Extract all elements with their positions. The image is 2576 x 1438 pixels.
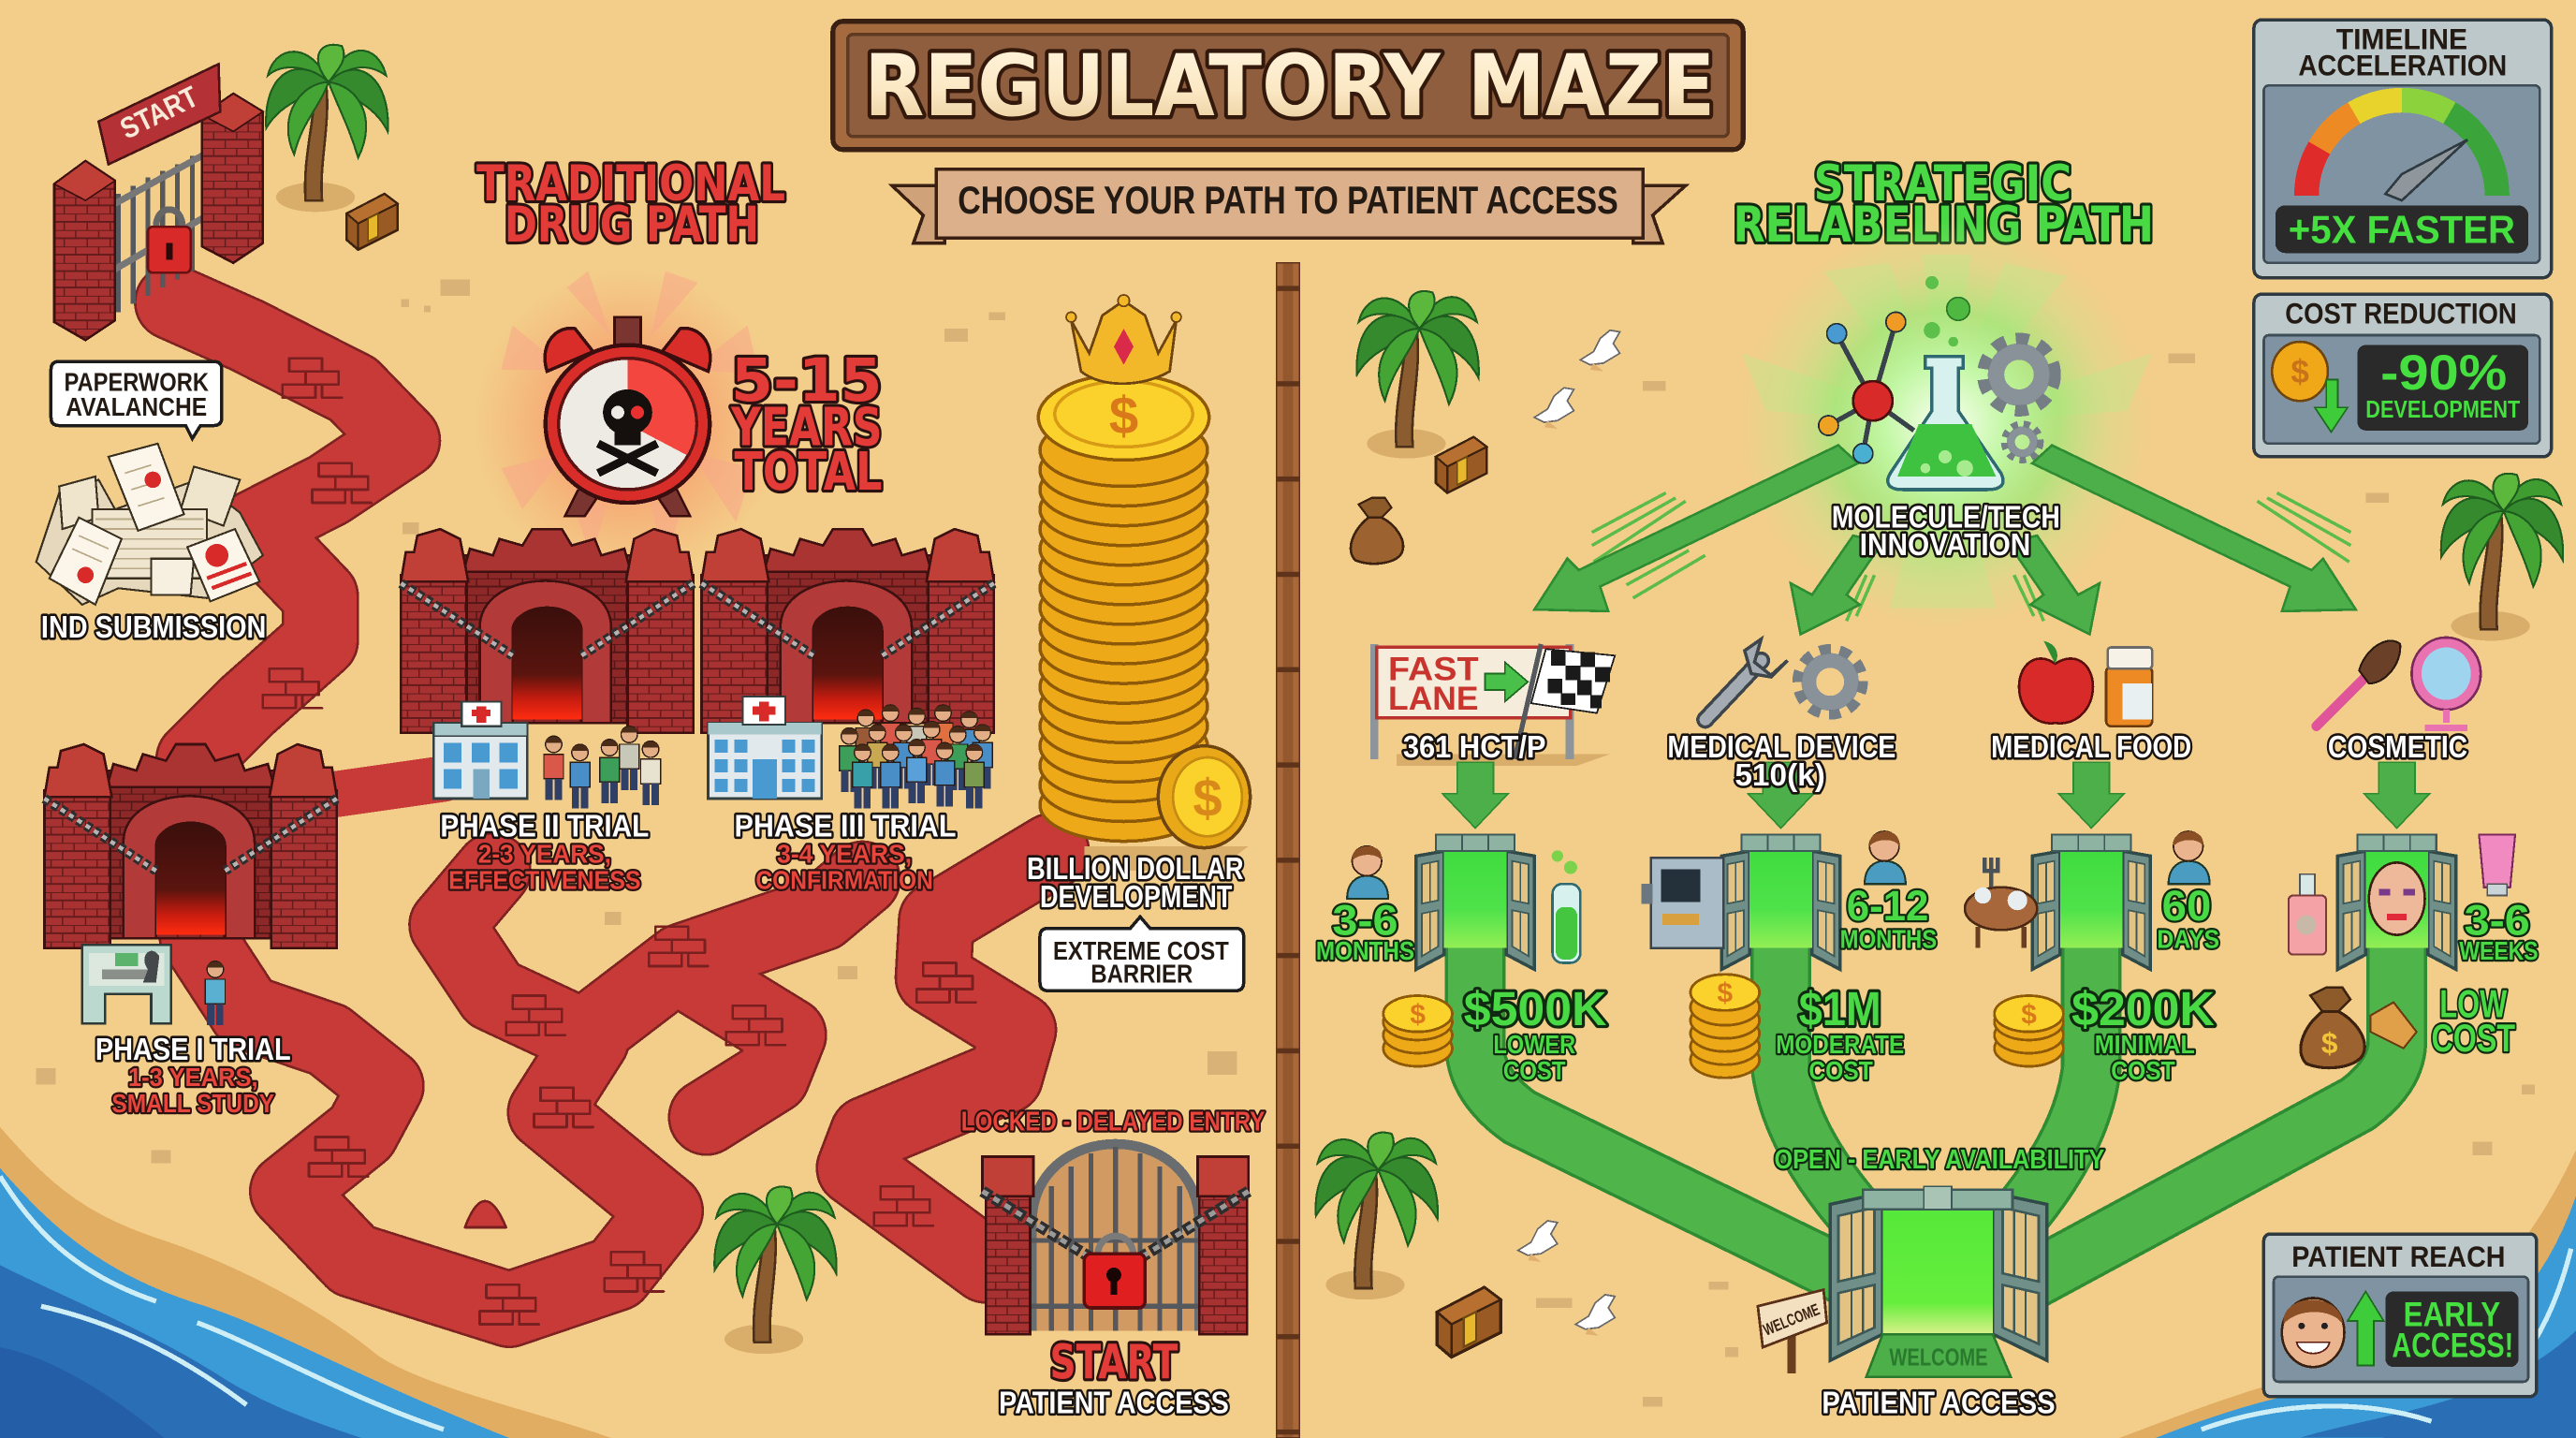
start gate bbox=[54, 64, 263, 340]
icon: test tube bbox=[1552, 850, 1580, 962]
panel: patient reach bbox=[2263, 1234, 2537, 1397]
label: IND submission: IND SUBMISSION bbox=[41, 610, 266, 645]
palm tree lower right side bbox=[1316, 1133, 1438, 1299]
label: start patient access: PATIENT ACCESS bbox=[999, 1386, 1229, 1420]
route medical food bbox=[1965, 640, 2219, 1085]
icon: phase II hospital bbox=[433, 701, 527, 799]
arrow: to 361 HCT/P bbox=[1534, 446, 1858, 611]
palm tree far right bbox=[2441, 474, 2563, 640]
welcome signpost: WELCOME bbox=[1761, 1299, 1822, 1340]
icon: money bag with tag: $ bbox=[2321, 1026, 2338, 1060]
route 361 HCT/P: 361 HCT/P bbox=[1403, 730, 1546, 765]
label: phase II trial bbox=[440, 809, 649, 894]
icon: smiling face bbox=[2282, 1298, 2344, 1367]
subtitle ribbon: CHOOSE YOUR PATH TO PATIENT ACCESS bbox=[958, 178, 1618, 222]
label: phase I trial bbox=[95, 1033, 291, 1118]
route 361 HCT/P: COST bbox=[1503, 1056, 1566, 1085]
seagull 3 bbox=[1518, 1221, 1558, 1262]
icon: paper pile bbox=[37, 444, 263, 605]
palm tree bottom left bbox=[714, 1187, 837, 1354]
route medical food: MEDICAL FOOD bbox=[1991, 730, 2191, 765]
label: molecule/tech innovation: MOLECULE/TECH bbox=[1832, 500, 2060, 535]
icon: flask, molecule and gears bbox=[1819, 276, 2056, 490]
icon: coin with down arrow bbox=[2272, 342, 2348, 433]
heading: traditional drug path: TRADITIONAL bbox=[476, 155, 785, 213]
coin tower with crown: $ bbox=[1109, 386, 1138, 445]
icon: coin stack: $ bbox=[1718, 978, 1734, 1009]
label: billion dollar development bbox=[1027, 852, 1244, 915]
panel: timeline acceleration bbox=[2254, 20, 2552, 278]
icon: phase III patient crowd bbox=[840, 705, 992, 808]
route medical food: COST bbox=[2111, 1056, 2175, 1085]
icon: coin stack: $ bbox=[1410, 999, 1426, 1030]
icon: dining table bbox=[1965, 858, 2037, 948]
panel: cost reduction bbox=[2254, 294, 2552, 457]
icon: fast lane sign bbox=[1370, 644, 1615, 766]
open patient access gate bbox=[1830, 1186, 2047, 1377]
icon: face bbox=[2369, 862, 2424, 935]
arrow: to cosmetic bbox=[2032, 446, 2356, 611]
arrow: to medical food bbox=[2008, 536, 2100, 634]
route 361 HCT/P bbox=[1316, 644, 1615, 1085]
route medical device: 6-12 bbox=[1847, 882, 1928, 930]
welcome mat: WELCOME bbox=[1889, 1343, 1988, 1371]
icon: phase II patient group bbox=[544, 726, 661, 808]
label: phase I trial: PHASE I TRIAL bbox=[95, 1033, 291, 1067]
route medical food: DAYS bbox=[2157, 925, 2219, 954]
label: molecule/tech innovation bbox=[1832, 500, 2060, 563]
icon: fast lane sign: FAST bbox=[1388, 652, 1479, 688]
label: phase III trial: PHASE III TRIAL bbox=[735, 809, 956, 844]
seagull 1 bbox=[1580, 330, 1620, 372]
icon: crown bbox=[1071, 301, 1177, 384]
label: billion dollar development: BILLION DOLLAR bbox=[1027, 852, 1244, 887]
icon: money bag with tag bbox=[2301, 988, 2417, 1068]
route cosmetic: COSMETIC bbox=[2328, 730, 2467, 765]
label: phase II trial: PHASE II TRIAL bbox=[440, 809, 649, 844]
treasure chest top left bbox=[346, 194, 398, 250]
route medical food: MINIMAL bbox=[2095, 1030, 2195, 1059]
route cosmetic: LOW bbox=[2439, 981, 2507, 1025]
heading: traditional drug path: DRUG PATH bbox=[505, 197, 759, 254]
icon: phase I lab bench bbox=[82, 945, 171, 1023]
icon: brush and mirror bbox=[2317, 638, 2481, 727]
route cosmetic: 3-6 bbox=[2465, 897, 2530, 945]
route medical food: 60 bbox=[2162, 882, 2211, 930]
welcome signpost bbox=[1758, 1290, 1827, 1373]
icon: coin with down arrow: $ bbox=[2291, 354, 2309, 390]
route 361 HCT/P: MONTHS bbox=[1316, 936, 1414, 965]
label: phase III trial: CONFIRMATION bbox=[755, 865, 933, 894]
label: billion dollar development: DEVELOPMENT bbox=[1040, 880, 1232, 915]
route 361 HCT/P: $500K bbox=[1464, 982, 1607, 1035]
green access paths bbox=[1475, 920, 2397, 1282]
icon: fast lane sign: LANE bbox=[1388, 681, 1479, 717]
route medical device: MEDICAL DEVICE bbox=[1667, 730, 1895, 765]
label: open early availability: OPEN - EARLY AVAILABILITY bbox=[1774, 1145, 2104, 1175]
callout: extreme cost barrier bbox=[1040, 917, 1244, 990]
icon: wrench and gear bbox=[1705, 639, 1863, 720]
central divider wall bbox=[1277, 263, 1299, 1438]
castle: phase II bbox=[401, 529, 694, 733]
start sign bbox=[98, 64, 220, 165]
label: phase II trial: 2-3 YEARS, bbox=[478, 839, 611, 868]
panel: cost reduction: COST REDUCTION bbox=[2285, 297, 2517, 330]
label: 5-15 years total bbox=[730, 345, 883, 503]
heading: strategic relabeling path: RELABELING PATH bbox=[1734, 197, 2154, 254]
route cosmetic: WEEKS bbox=[2459, 936, 2539, 965]
treasure chest upper right bbox=[1436, 437, 1486, 493]
icon: coin stack bbox=[1690, 975, 1760, 1078]
icon: device machine bbox=[1641, 858, 1723, 948]
panel: patient reach: ACCESS! bbox=[2392, 1327, 2513, 1365]
heading: traditional drug path bbox=[476, 155, 785, 254]
ocean: bottom left bbox=[0, 1127, 611, 1438]
start padlock bbox=[148, 210, 191, 272]
panel: timeline acceleration: +5X FASTER bbox=[2289, 208, 2515, 252]
panel: patient reach: EARLY bbox=[2404, 1295, 2500, 1333]
sand speckles bbox=[37, 279, 2535, 1406]
icon: cream tube bbox=[2479, 835, 2515, 895]
route 361 HCT/P: 3-6 bbox=[1332, 897, 1398, 945]
title text: REGULATORY MAZE bbox=[864, 36, 1715, 136]
icon: coin stack bbox=[1995, 996, 2063, 1066]
money bag upper right bbox=[1351, 498, 1403, 564]
label: 5-15 years total: TOTAL bbox=[735, 442, 883, 503]
innovation glow bbox=[1740, 218, 2152, 629]
label: phase II trial: EFFECTIVENESS bbox=[448, 865, 641, 894]
large coin bbox=[1158, 746, 1251, 848]
route cosmetic bbox=[2289, 638, 2539, 1068]
heading: strategic relabeling path bbox=[1734, 155, 2154, 254]
route medical device: $1M bbox=[1799, 982, 1881, 1035]
locked padlock bbox=[1084, 1236, 1145, 1308]
coin tower with crown: $ bbox=[1193, 769, 1222, 828]
route medical device: MONTHS bbox=[1840, 925, 1937, 954]
label: phase I trial: SMALL STUDY bbox=[111, 1089, 274, 1118]
seagull 4 bbox=[1575, 1295, 1615, 1336]
route medical device: 510(k) bbox=[1734, 758, 1825, 793]
icon: phase III hospital bbox=[708, 697, 822, 799]
heading: strategic relabeling path: STRATEGIC bbox=[1814, 155, 2071, 213]
icon: phase I volunteer bbox=[205, 961, 225, 1025]
label: locked delayed entry: LOCKED - DELAYED ENTRY bbox=[961, 1107, 1265, 1137]
callout: paperwork avalanche: PAPERWORK bbox=[65, 368, 210, 397]
route cosmetic: COST bbox=[2431, 1016, 2515, 1060]
label: molecule/tech innovation: INNOVATION bbox=[1860, 528, 2030, 563]
gauge bbox=[2306, 100, 2497, 200]
icon: coin stack bbox=[1383, 996, 1453, 1066]
route medical device: MODERATE bbox=[1776, 1030, 1904, 1059]
large gear bbox=[1983, 339, 2056, 411]
route 361 HCT/P: LOWER bbox=[1493, 1030, 1575, 1059]
route medical device bbox=[1641, 639, 1937, 1085]
traditional red maze path bbox=[172, 302, 1051, 1325]
route medical food: $200K bbox=[2071, 982, 2215, 1035]
start sign: START bbox=[114, 80, 203, 145]
coin tower with crown bbox=[1038, 295, 1251, 871]
label: patient access: PATIENT ACCESS bbox=[1822, 1386, 2056, 1420]
callout: paperwork avalanche: AVALANCHE bbox=[66, 392, 207, 421]
title plaque bbox=[833, 22, 1743, 150]
treasure chest lower bbox=[1437, 1287, 1500, 1357]
icon: coin stack: $ bbox=[2021, 999, 2037, 1030]
castle: phase I bbox=[44, 744, 337, 948]
panel: cost reduction: -90% bbox=[2380, 345, 2507, 401]
alarm clock bbox=[472, 268, 783, 580]
label: start patient access: START bbox=[1050, 1335, 1178, 1390]
callout: extreme cost barrier: EXTREME COST bbox=[1053, 936, 1229, 965]
panel: timeline acceleration: TIMELINE bbox=[2336, 22, 2467, 56]
route medical device: COST bbox=[1808, 1056, 1873, 1085]
label: start patient access bbox=[999, 1335, 1229, 1420]
label: phase III trial bbox=[735, 809, 956, 894]
panel: patient reach: PATIENT REACH bbox=[2291, 1240, 2505, 1273]
panel: cost reduction: DEVELOPMENT bbox=[2365, 395, 2520, 423]
small gear bbox=[2004, 424, 2041, 460]
welcome mat bbox=[1866, 1334, 2011, 1377]
callout: extreme cost barrier: BARRIER bbox=[1090, 960, 1193, 989]
label: 5-15 years total: 5-15 bbox=[731, 345, 883, 415]
subtitle ribbon bbox=[892, 169, 1686, 243]
label: 5-15 years total: YEARS bbox=[730, 398, 883, 459]
icon: apple and pill bottle bbox=[2019, 640, 2152, 726]
palm tree right upper-left bbox=[1356, 291, 1479, 459]
castle: phase III bbox=[701, 529, 994, 733]
seagull 2 bbox=[1534, 388, 1573, 429]
icon: cosmetic bottle bbox=[2289, 874, 2326, 955]
callout: paperwork avalanche bbox=[51, 361, 222, 439]
locked patient access gate bbox=[983, 1144, 1249, 1334]
arrow: to medical device bbox=[1791, 536, 1882, 634]
palm tree top left bbox=[266, 45, 388, 212]
speed lines bbox=[1592, 493, 2351, 621]
label: phase I trial: 1-3 YEARS, bbox=[128, 1063, 258, 1092]
ocean: bottom right bbox=[2119, 1151, 2576, 1438]
label: phase III trial: 3-4 YEARS, bbox=[777, 839, 912, 868]
panel: timeline acceleration: ACCELERATION bbox=[2298, 49, 2507, 82]
